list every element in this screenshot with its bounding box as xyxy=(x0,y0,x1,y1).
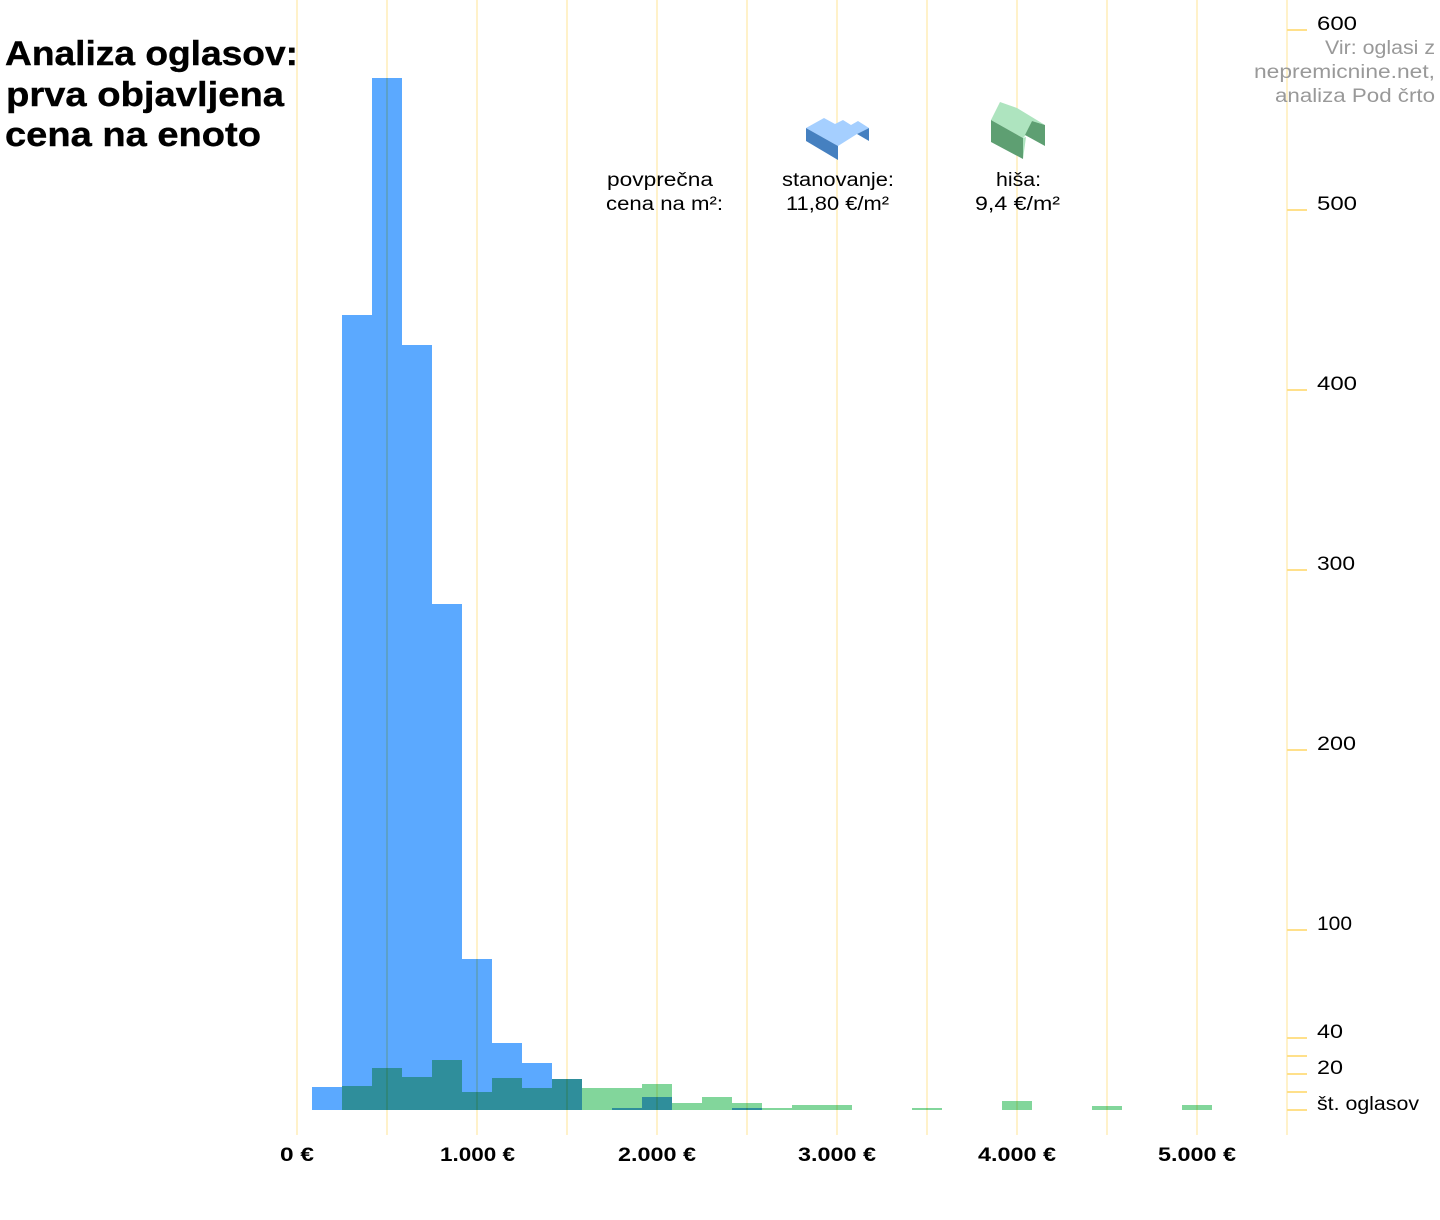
apartment average price: stanovanje: xyxy=(782,170,894,191)
histogram: apartments (blue) xyxy=(312,78,762,1110)
title: Analiza oglasov: xyxy=(5,35,298,73)
average price label: cena na m²: xyxy=(606,194,723,215)
house average price: 9,4 €/m² xyxy=(975,194,1060,215)
x-axis labels: 0 € xyxy=(280,1145,315,1166)
x-axis labels: 1.000 € xyxy=(440,1145,515,1166)
average price label xyxy=(606,170,723,215)
apartment average price xyxy=(782,170,894,215)
apartment average price: 11,80 €/m² xyxy=(786,194,889,215)
x-axis labels: 4.000 € xyxy=(978,1145,1057,1166)
y-axis labels xyxy=(1317,14,1420,1115)
title: cena na enoto xyxy=(5,116,261,154)
source note: nepremicnine.net, xyxy=(1254,62,1435,83)
source note xyxy=(1254,38,1435,107)
average price label: povprečna xyxy=(607,170,714,191)
y-axis labels: 40 xyxy=(1317,1022,1343,1043)
y-axis tick marks xyxy=(1287,30,1307,1110)
x-axis labels: 3.000 € xyxy=(798,1145,877,1166)
house average price xyxy=(975,170,1060,215)
y-axis labels: št. oglasov xyxy=(1317,1094,1420,1115)
y-axis labels: 100 xyxy=(1317,914,1352,935)
y-axis labels: 500 xyxy=(1317,194,1357,215)
source note: analiza Pod črto xyxy=(1275,86,1435,107)
source note: Vir: oglasi z xyxy=(1325,38,1435,59)
title xyxy=(5,35,298,154)
y-axis labels: 20 xyxy=(1317,1058,1343,1079)
x-axis labels: 5.000 € xyxy=(1158,1145,1237,1166)
icon: apartment xyxy=(806,118,869,160)
vertical price gridlines xyxy=(297,0,1287,1135)
title: prva objavljena xyxy=(6,76,285,114)
y-axis labels: 200 xyxy=(1317,734,1356,755)
icon: house xyxy=(991,102,1045,159)
house average price: hiša: xyxy=(996,170,1041,191)
y-axis labels: 300 xyxy=(1317,554,1355,575)
histogram: houses (green) xyxy=(342,1060,1212,1110)
x-axis labels: 2.000 € xyxy=(618,1145,697,1166)
y-axis labels: 400 xyxy=(1317,374,1357,395)
x-axis labels xyxy=(280,1145,1237,1166)
y-axis labels: 600 xyxy=(1317,14,1357,35)
